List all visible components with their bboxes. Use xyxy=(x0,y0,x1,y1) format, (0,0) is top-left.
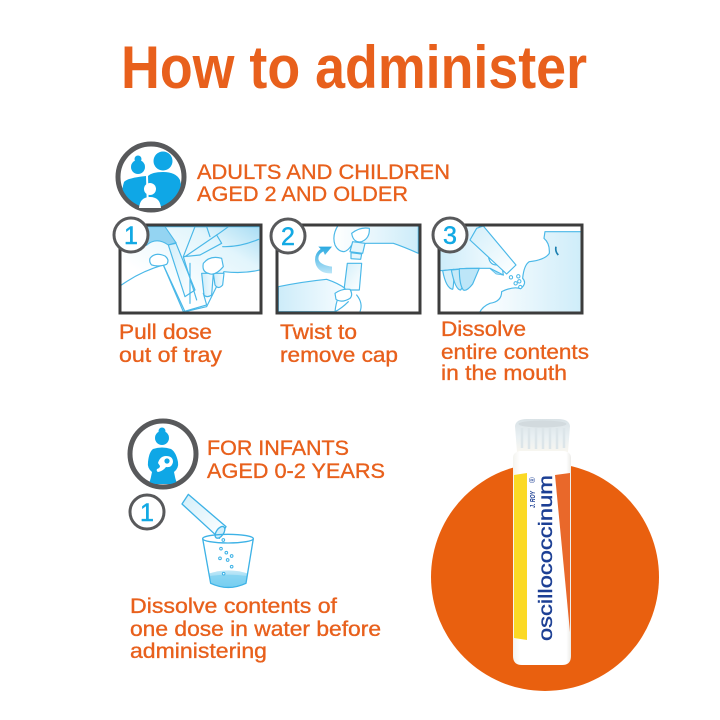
caption: entire contents xyxy=(441,341,589,364)
frame xyxy=(120,225,261,313)
heading: for infants aged 0-2 years: AGED 0-2 YEARS xyxy=(207,460,385,483)
icon: mother and infant xyxy=(130,421,196,487)
product: oscillococcinum tube on orange circle xyxy=(431,419,659,691)
caption: out of tray xyxy=(119,344,223,367)
step number 1: 1 xyxy=(140,499,154,527)
step number 3: 3 xyxy=(443,222,457,250)
caption: Dissolve contents of xyxy=(130,595,337,618)
caption: Twist to xyxy=(280,321,357,344)
orange wedge xyxy=(555,473,570,632)
icon: family xyxy=(118,144,184,211)
brand text: ® xyxy=(528,477,537,483)
illustration: hands pulling dose from tray xyxy=(120,227,260,312)
frame xyxy=(277,225,420,313)
caption xyxy=(130,595,381,663)
caption: in the mouth xyxy=(441,362,567,385)
heading: adults and children aged 2 and older: AGED 2 AND OLDER xyxy=(197,183,408,206)
caption: Dissolve xyxy=(441,318,526,341)
heading: for infants aged 0-2 years: FOR INFANTS xyxy=(207,437,349,460)
illustration: pouring pellets into mouth xyxy=(440,226,580,312)
heading: adults and children aged 2 and older: ADULTS AND CHILDREN xyxy=(197,161,450,184)
panel: step 2 twist cap xyxy=(271,219,420,367)
frame xyxy=(439,225,582,313)
illustration: dose tube pouring into glass of water xyxy=(182,494,253,587)
caption xyxy=(441,318,589,385)
step number 1 xyxy=(130,495,164,529)
caption xyxy=(280,321,398,367)
heading: adults and children aged 2 and older xyxy=(197,161,450,206)
panel: step 1 pull dose xyxy=(114,218,261,367)
brand text xyxy=(528,475,557,641)
yellow stripe xyxy=(514,473,527,640)
caption: Pull dose xyxy=(119,321,212,344)
brand text: J. ROY xyxy=(530,490,537,508)
caption xyxy=(119,321,223,367)
step number 2 xyxy=(271,219,305,253)
caption: administering xyxy=(130,640,267,663)
heading: for infants aged 0-2 years xyxy=(207,437,385,483)
step number 2: 2 xyxy=(281,223,295,251)
step number 1: 1 xyxy=(124,222,138,250)
panel: step 3 dissolve xyxy=(433,218,589,385)
section: infants xyxy=(130,421,385,663)
step number 3 xyxy=(433,218,467,252)
caption: one dose in water before xyxy=(130,618,381,641)
cap xyxy=(515,419,570,452)
brand text: oscillococcinum xyxy=(536,475,557,641)
orange circle xyxy=(431,463,659,691)
section: adults and children xyxy=(118,144,450,211)
caption: remove cap xyxy=(280,344,398,367)
step number 1 xyxy=(114,218,148,252)
tube body xyxy=(513,451,571,665)
illustration: hands twisting cap xyxy=(278,225,418,312)
title: How to administer xyxy=(121,34,587,101)
